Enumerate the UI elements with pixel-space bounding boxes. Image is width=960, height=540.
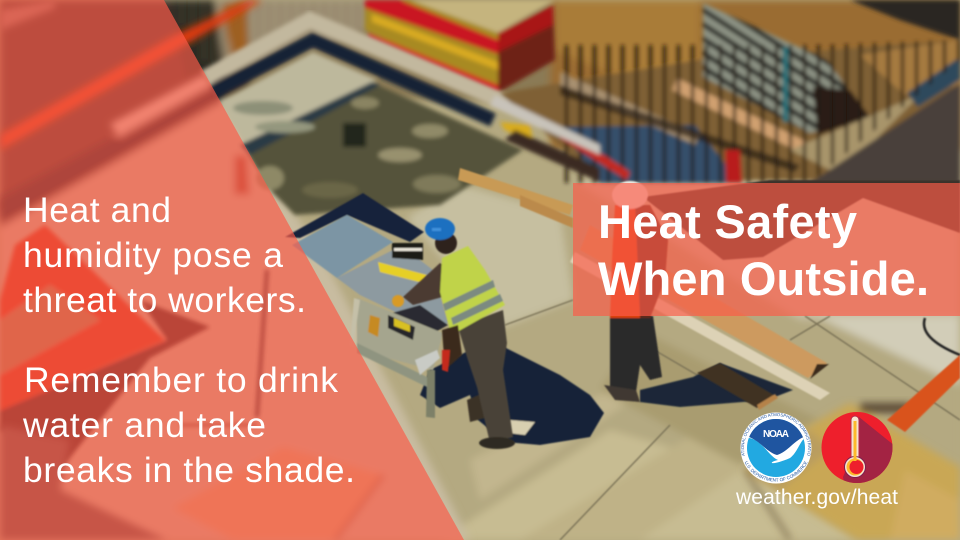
worker with blue helmet and safety vest <box>392 218 515 449</box>
icon: NOAA logo <box>740 412 812 484</box>
text block: heat and humidity threat: threat to workers. <box>23 280 306 320</box>
lumber on ground <box>697 363 778 410</box>
panel: title banner <box>573 183 960 316</box>
title: When Outside. <box>598 252 929 305</box>
plywood board and orange beam <box>743 403 960 540</box>
title <box>598 195 929 305</box>
text block: drink water and take breaks: breaks in the shade. <box>23 450 355 490</box>
second worker in orange <box>604 181 668 402</box>
stack of red and yellow material <box>365 0 555 93</box>
orange machine <box>0 225 267 470</box>
text block: heat and humidity threat: humidity pose a <box>23 235 283 275</box>
website link text: weather.gov/heat <box>735 486 898 509</box>
icon: NOAA logo: U.S. DEPARTMENT OF COMMERCE <box>744 460 808 482</box>
left concrete floor hidden under overlay <box>0 0 470 540</box>
seams in the concrete <box>505 300 960 540</box>
text block: drink water and take breaks: Remember to drink <box>24 360 338 400</box>
text block: heat and humidity threat: Heat and <box>23 190 171 230</box>
text block: heat and humidity threat <box>23 190 306 320</box>
title: Heat Safety <box>598 195 857 248</box>
shadow wedge and wooden planks <box>458 168 960 400</box>
text block: drink water and take breaks <box>22 360 355 490</box>
text block: drink water and take breaks: water and take <box>22 405 266 445</box>
panel: diagonal coral overlay <box>0 0 464 540</box>
icon: NOAA logo: NATIONAL OCEANIC AND ATMOSPHERIC ADMINISTRATION <box>741 413 811 456</box>
lower left dark corner and wooden slab <box>0 425 383 540</box>
rebar, pipes and concrete wall <box>490 0 960 183</box>
orange beam and cable <box>887 318 960 432</box>
icon: NOAA logo: NOAA <box>763 429 789 440</box>
upper background: wall, ground and fence <box>0 0 960 215</box>
icon: thermometer <box>822 412 892 483</box>
table saw <box>285 193 448 418</box>
shadows on the ground <box>420 345 793 445</box>
blue slab edge and mottled concrete slab <box>205 20 610 215</box>
